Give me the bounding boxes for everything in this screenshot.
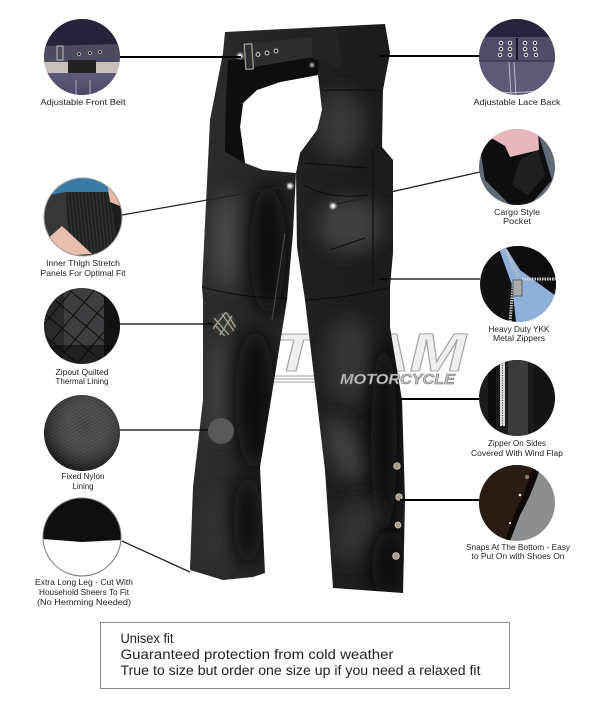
leather folds and shading: [199, 90, 408, 600]
callout: adjustable front belt: [40, 19, 126, 107]
belt buckle: [244, 44, 253, 69]
label line 2: Pocket: [503, 216, 532, 226]
callout: zipper on sides: [471, 360, 563, 458]
note line 3: True to size but order one size up if you need a relaxed fit: [120, 663, 481, 678]
info box: sizing notes: [100, 622, 510, 688]
label line 2: Metal Zippers: [493, 333, 545, 343]
inset: quilted lining patch: [212, 312, 236, 336]
label line 2: Covered With Wind Flap: [471, 448, 563, 458]
label: Snaps At The Bottom - Easy: [466, 542, 571, 552]
icon: side zipper photo: [479, 360, 555, 436]
label: Extra Long Leg - Cut With: [35, 577, 133, 587]
belt grommets: [256, 49, 278, 56]
callout: adjustable lace back: [474, 19, 561, 107]
inner waist opening: [240, 75, 322, 173]
label: Adjustable Lace Back: [474, 97, 561, 107]
label line 2: Lining: [72, 481, 94, 491]
belt loop: [312, 28, 343, 68]
icon: snaps photo: [479, 465, 555, 541]
logo speed lines: [268, 376, 340, 382]
belt strap: [243, 37, 313, 68]
label: Adjustable Front Belt: [40, 97, 126, 107]
icon outline: [43, 498, 121, 576]
icon: belt photo: [44, 19, 120, 95]
product photo: leather chaps: [190, 24, 408, 600]
note line 2: Guaranteed protection from cold weather: [120, 647, 394, 662]
label line 2: Panels For Optimal Fit: [40, 268, 126, 278]
label: Heavy Duty YKK: [488, 324, 550, 334]
icon: cargo pocket photo: [479, 128, 555, 205]
box frame: [100, 622, 510, 688]
inset: nylon lining patch: [208, 418, 234, 444]
label: Fixed Nylon: [62, 471, 105, 481]
label line 2: Household Sheers To Fit: [39, 587, 130, 597]
label line 3: (No Hemming Needed): [37, 597, 131, 607]
leader lines: [120, 56, 480, 572]
chaps silhouette: [190, 24, 405, 593]
callout: heavy duty YKK zippers: [480, 246, 556, 343]
icon: nylon fabric photo: [44, 395, 120, 471]
label: Zipout Quilted: [56, 367, 109, 377]
callout: inner thigh stretch panels: [40, 178, 126, 278]
label line 2: Thermal Lining: [56, 376, 109, 386]
label: Inner Thigh Stretch: [46, 258, 120, 268]
icon: stretch panel photo: [44, 178, 122, 256]
watermark: TEAM Motorcycle logo: [268, 323, 467, 383]
icon: cut leg photo: [44, 498, 120, 542]
watermark: MOTORCYCLE word: MOTORCYCLE: [340, 371, 456, 388]
glow points on the product: [237, 53, 336, 209]
label line 2: to Put On with Shoes On: [472, 551, 565, 561]
icon: quilted lining photo: [44, 288, 120, 364]
icon outline: [44, 178, 122, 256]
callout: zipout quilted lining: [44, 288, 120, 386]
icon: metal zipper photo: [480, 246, 556, 322]
callout: extra long leg: [35, 498, 133, 607]
logo word TEAM: TEAM: [274, 323, 467, 383]
note line 1: Unisex fit: [120, 631, 174, 646]
label: Cargo Style: [494, 207, 540, 217]
callout: snaps at the bottom: [466, 465, 571, 561]
inner back lining: [225, 56, 318, 163]
label: Zipper On Sides: [488, 438, 546, 448]
icon: lace back photo: [479, 19, 555, 95]
snap buttons: [393, 463, 402, 559]
callout: cargo style pocket: [479, 128, 555, 226]
callout: fixed nylon lining: [44, 395, 120, 491]
